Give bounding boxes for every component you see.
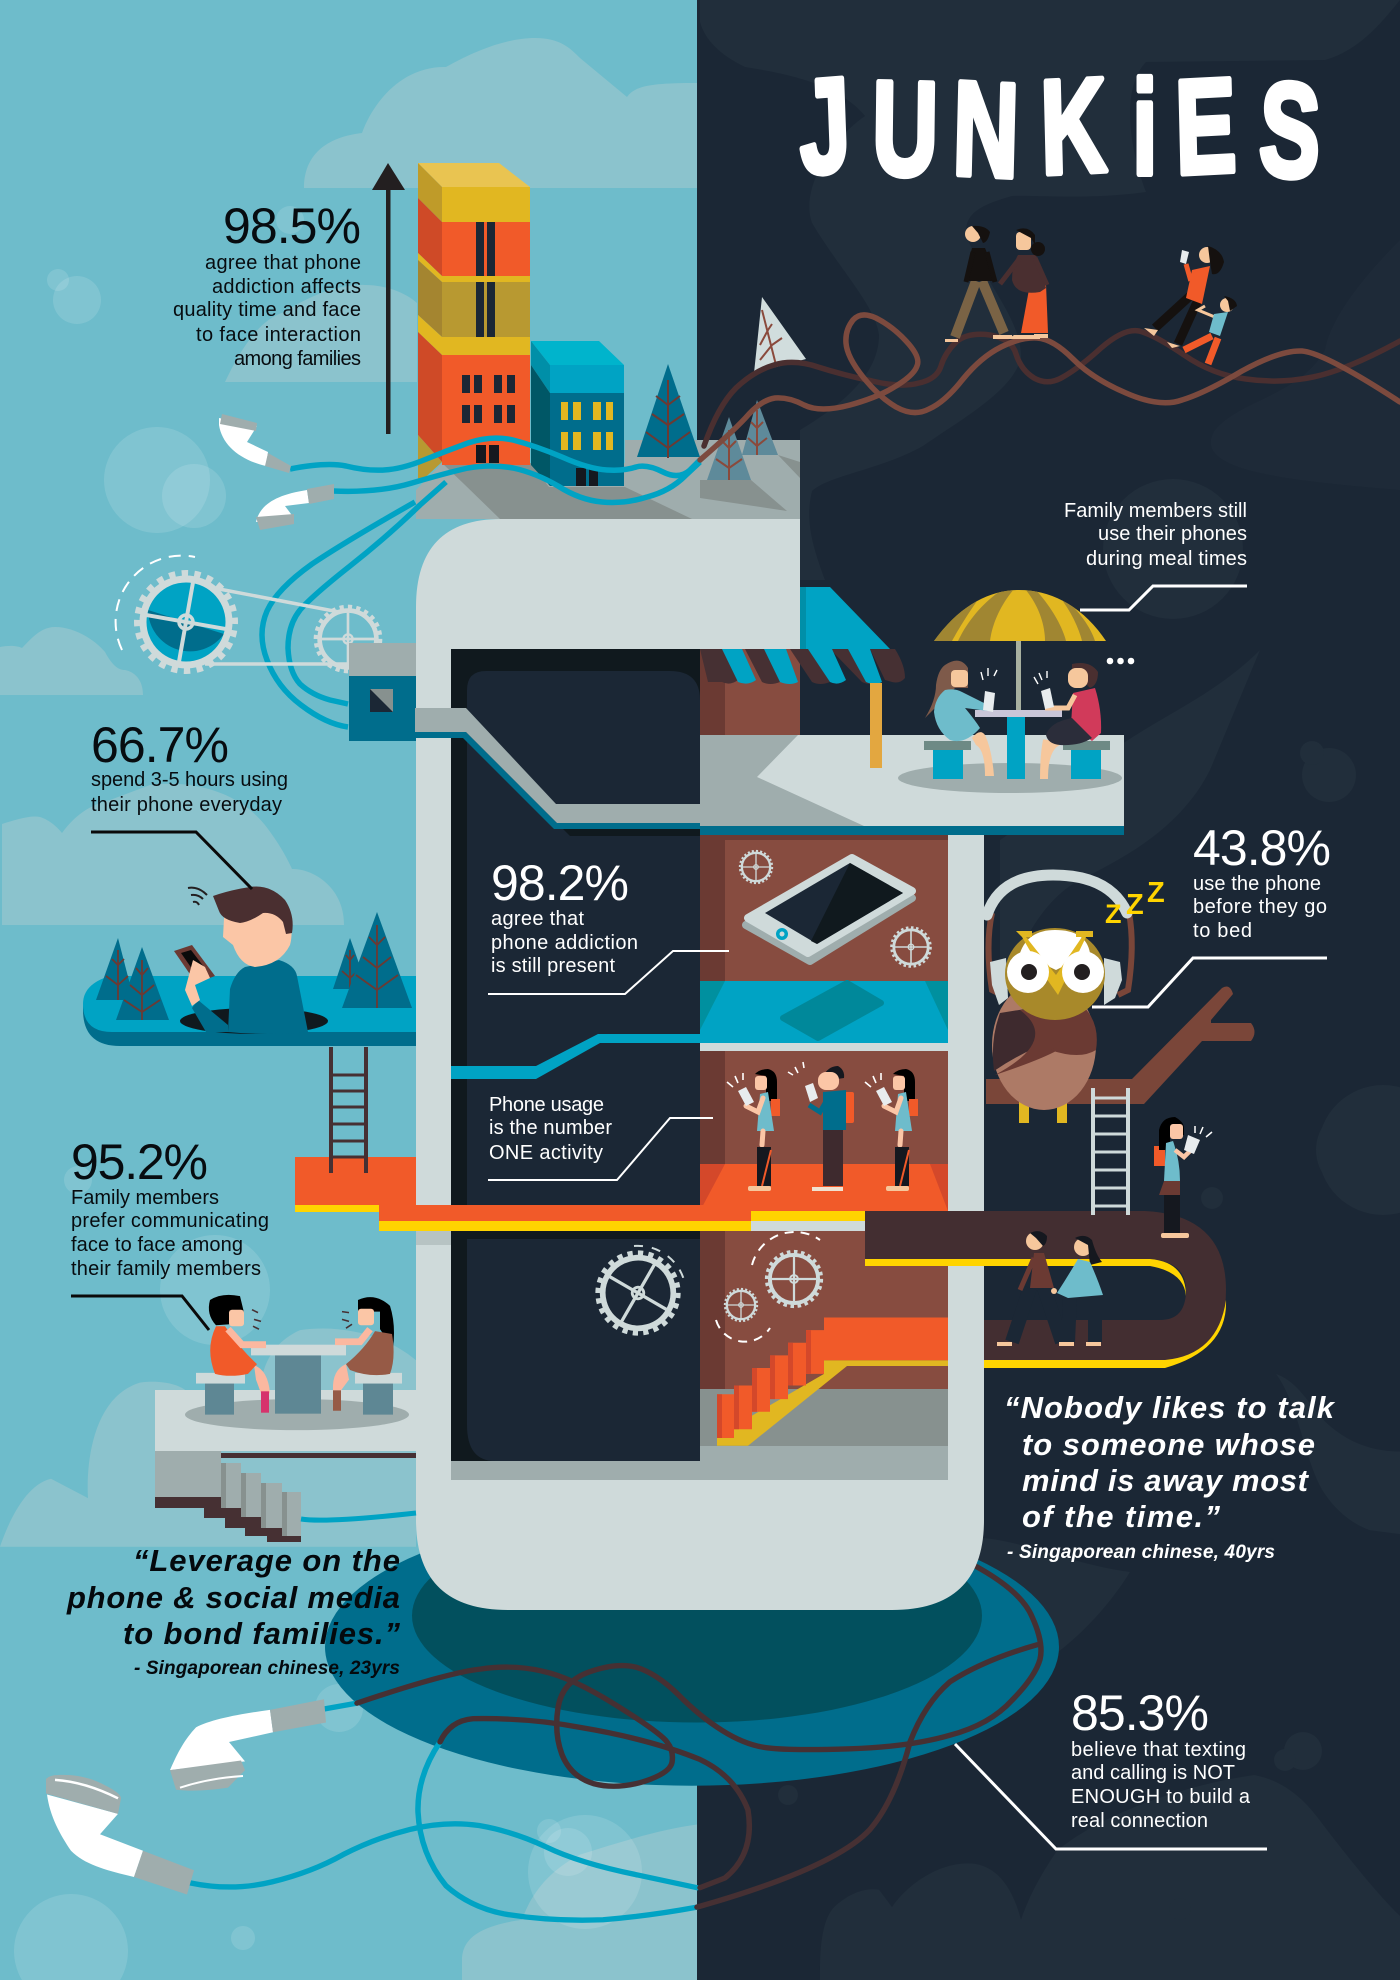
screen grey shelf band bbox=[415, 708, 700, 829]
shop building bbox=[700, 649, 800, 735]
stat 98.5%: agree that phone bbox=[205, 252, 361, 274]
quote left bbox=[66, 1543, 400, 1679]
title JUNKiES: JUNKiES bbox=[797, 50, 1323, 208]
sleeping z letters: Z bbox=[1105, 899, 1122, 929]
sleeping z letters bbox=[1105, 877, 1165, 929]
stat 66.7%: their phone everyday bbox=[91, 794, 282, 816]
owl with headphones bbox=[987, 875, 1132, 1123]
brown tube walkway bbox=[865, 1211, 1226, 1368]
stat 95.2%: Family members bbox=[71, 1187, 219, 1209]
bottom earphone cables bbox=[190, 1564, 1041, 1920]
connector box bbox=[349, 643, 416, 741]
callout phone usage: ONE activity bbox=[489, 1142, 603, 1164]
rooftop platform bbox=[416, 440, 800, 640]
woman at patio table bbox=[925, 661, 997, 776]
icon: belt and gears bbox=[116, 556, 380, 679]
screen blue band bbox=[451, 1034, 700, 1079]
quote left: to bond families.” bbox=[123, 1616, 400, 1651]
left orange ledge and yellow trims bbox=[295, 1157, 865, 1245]
callout meal times: use their phones bbox=[1098, 523, 1247, 545]
rooftop trees bbox=[637, 297, 806, 480]
left blue platform bbox=[83, 976, 416, 1046]
callout meal times: Family members still bbox=[1064, 500, 1247, 522]
stat 85.3%: 85.3% bbox=[1071, 1685, 1209, 1741]
room one with phone bbox=[700, 835, 948, 1051]
stat 95.2%: 95.2% bbox=[71, 1134, 208, 1190]
callout meal times: during meal times bbox=[1086, 548, 1247, 570]
stat 43.8%: before they go bbox=[1193, 896, 1327, 918]
stat 98.2%: agree that bbox=[491, 908, 584, 930]
sky clouds bbox=[0, 38, 697, 1980]
stat 98.2%: phone addiction bbox=[491, 932, 638, 954]
quote right: mind is away most bbox=[1022, 1463, 1310, 1498]
stat 98.5% bbox=[173, 198, 361, 370]
rooftop earphone cables bbox=[262, 438, 700, 727]
stat 85.3%: and calling is NOT bbox=[1071, 1762, 1235, 1784]
quote left: “Leverage on the bbox=[133, 1543, 400, 1578]
walking couple in tube bbox=[997, 1231, 1103, 1346]
stat 85.3%: ENOUGH to build a bbox=[1071, 1786, 1251, 1808]
girl in orange bbox=[209, 1295, 270, 1413]
couple walking on cable bbox=[945, 226, 1048, 342]
man at patio table bbox=[1034, 663, 1101, 779]
mother and child on cable bbox=[1144, 246, 1237, 364]
patio floor bbox=[700, 735, 1124, 835]
room three bbox=[451, 1231, 948, 1480]
quote right bbox=[1004, 1390, 1336, 1563]
phone body bbox=[416, 519, 984, 1610]
screen gear bbox=[583, 1238, 693, 1348]
lower left terrace bbox=[155, 1390, 416, 1542]
stat 98.5%: 98.5% bbox=[223, 198, 361, 254]
callout phone usage bbox=[488, 1094, 713, 1180]
icon: wifi signal bbox=[188, 888, 207, 905]
night smoke shapes bbox=[700, 0, 1400, 1980]
stat 95.2%: prefer communicating bbox=[71, 1210, 269, 1232]
icon: smartphone bbox=[746, 858, 912, 961]
room two with phone users bbox=[700, 1051, 948, 1211]
icon: earbud bottom one bbox=[170, 1699, 326, 1791]
icon: ladder left bbox=[331, 1047, 366, 1173]
patio table scene bbox=[898, 661, 1122, 793]
sleeping z letters: Z bbox=[1147, 877, 1165, 909]
sky bubbles bbox=[14, 206, 642, 1980]
stat 95.2% bbox=[71, 1134, 269, 1330]
stat 95.2%: face to face among bbox=[71, 1234, 243, 1256]
person by ladder bbox=[1154, 1117, 1212, 1238]
stat 98.5%: to face interaction bbox=[196, 324, 361, 346]
stat 43.8%: use the phone bbox=[1193, 873, 1321, 895]
stat 43.8%: to bed bbox=[1193, 920, 1252, 942]
icon: earbud bottom two bbox=[46, 1775, 194, 1894]
sleeping z letters: Z bbox=[1126, 889, 1144, 921]
stat 85.3% bbox=[955, 1685, 1267, 1849]
quote right: “Nobody likes to talk bbox=[1004, 1390, 1336, 1425]
man in hole using phone bbox=[174, 887, 308, 1034]
tangled brown cables with walkers bbox=[700, 315, 1400, 460]
stat 98.5%: addiction affects bbox=[212, 276, 361, 298]
icon: earbud top one bbox=[219, 414, 291, 473]
tall orange and yellow building bbox=[418, 163, 530, 484]
quote left: phone & social media bbox=[66, 1580, 400, 1615]
icon: ladder right bbox=[1093, 1088, 1128, 1215]
callout phone usage: is the number bbox=[489, 1117, 612, 1139]
stat 98.5%: quality time and face bbox=[173, 299, 361, 321]
phone screen left side bbox=[451, 649, 700, 1461]
stairs bbox=[717, 1317, 948, 1446]
quote right: to someone whose bbox=[1022, 1427, 1315, 1462]
quote right: - Singaporean chinese, 40yrs bbox=[1007, 1542, 1275, 1563]
stat 85.3%: believe that texting bbox=[1071, 1739, 1246, 1761]
stat 98.2%: is still present bbox=[491, 955, 615, 977]
stat 98.2% bbox=[488, 855, 729, 994]
stat 98.2%: 98.2% bbox=[491, 855, 629, 911]
stat 43.8%: 43.8% bbox=[1193, 820, 1331, 876]
stat 98.5%: among families bbox=[234, 348, 361, 370]
stat 66.7%: 66.7% bbox=[91, 717, 229, 773]
tree branch bbox=[986, 986, 1254, 1104]
stat 85.3%: real connection bbox=[1071, 1810, 1208, 1832]
stat 95.2%: their family members bbox=[71, 1258, 261, 1280]
awning post bbox=[870, 683, 882, 768]
icon: earbud top two bbox=[256, 484, 334, 530]
callout phone usage: Phone usage bbox=[489, 1094, 604, 1116]
icon: umbrella bbox=[930, 588, 1106, 715]
platform trees bbox=[96, 912, 412, 1020]
growth arrow bbox=[372, 163, 405, 434]
stat 66.7% bbox=[91, 717, 288, 889]
callout meal times bbox=[1064, 500, 1247, 610]
speech dots bbox=[1107, 658, 1134, 664]
person: girl one bbox=[727, 1069, 780, 1191]
blue building bbox=[531, 341, 624, 486]
quote right: of the time.” bbox=[1022, 1499, 1220, 1534]
table scene with two girls bbox=[185, 1295, 409, 1430]
stat 43.8% bbox=[1092, 820, 1331, 1007]
left sky background bbox=[0, 0, 697, 1980]
stat 66.7%: spend 3-5 hours using bbox=[91, 769, 288, 791]
base ellipse under phone bbox=[325, 1508, 1059, 1786]
quote left: - Singaporean chinese, 23yrs bbox=[134, 1658, 400, 1679]
person: man in room bbox=[788, 1062, 854, 1191]
shop awning bbox=[700, 587, 905, 684]
right night background bbox=[697, 0, 1400, 1980]
person: girl two bbox=[865, 1069, 918, 1191]
girl in brown bbox=[333, 1297, 394, 1411]
